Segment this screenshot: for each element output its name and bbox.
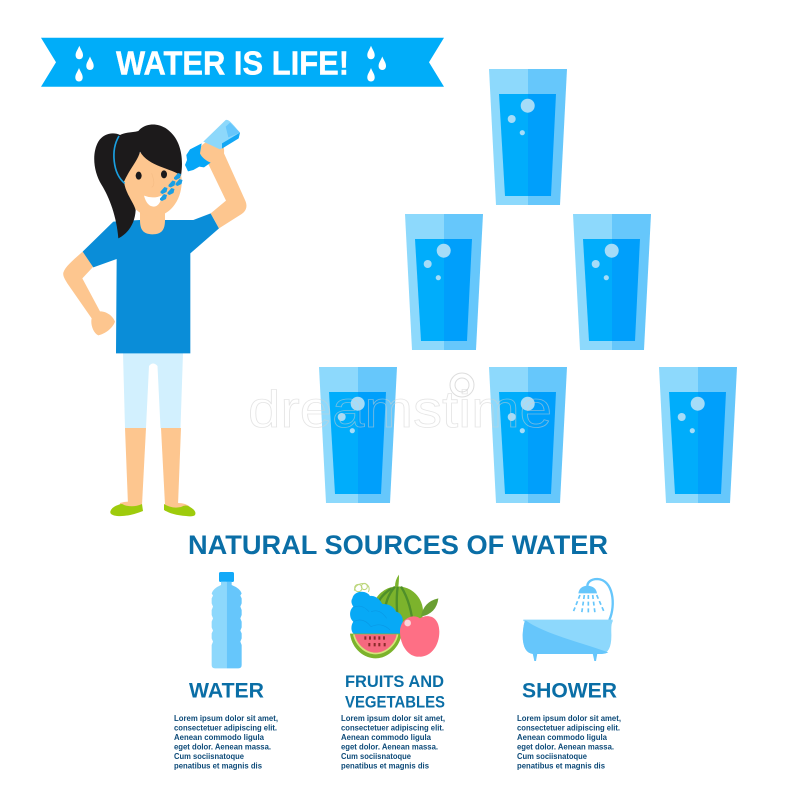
tendril bbox=[354, 583, 369, 592]
right arm bbox=[199, 140, 246, 228]
column: fruits and vegetables bbox=[341, 673, 445, 770]
text block: fruits and vegetables bbox=[341, 713, 445, 770]
glass row 2 left bbox=[405, 214, 483, 350]
heading: fruits and vegetables: VEGETABLES bbox=[345, 694, 445, 712]
watermelon bbox=[372, 586, 423, 637]
text block: shower: penatibus et magnis dis bbox=[517, 760, 605, 770]
text block: water: Lorem ipsum dolor sit amet, bbox=[174, 713, 278, 723]
text block: fruits and vegetables: penatibus et magnis dis bbox=[341, 760, 429, 770]
glass row 3 middle bbox=[489, 367, 567, 503]
text block: water: penatibus et magnis dis bbox=[174, 760, 262, 770]
text block: water: consectetuer adipiscing elit. bbox=[174, 722, 277, 732]
text block: shower: consectetuer adipiscing elit. bbox=[517, 722, 620, 732]
icon: water bottle bbox=[212, 572, 242, 668]
face bbox=[124, 150, 182, 217]
text block: shower: Lorem ipsum dolor sit amet, bbox=[517, 713, 621, 723]
shower head bbox=[578, 586, 597, 593]
text block: water: eget dolor. Aenean massa. bbox=[174, 742, 271, 752]
text block: shower: Cum sociisnatoque bbox=[517, 751, 587, 761]
splashing water droplets bbox=[160, 173, 182, 201]
mouth bbox=[144, 195, 162, 207]
grapes bbox=[350, 592, 403, 635]
left arm bbox=[63, 252, 115, 335]
text block: shower: Aenean commodo ligula bbox=[517, 732, 607, 742]
text block: water: Cum sociisnatoque bbox=[174, 751, 244, 761]
shower spray bbox=[573, 595, 604, 613]
title banner bbox=[41, 38, 444, 87]
glass row 2 right bbox=[573, 214, 651, 350]
text block: water bbox=[174, 713, 278, 770]
tub feet bbox=[533, 653, 597, 661]
column: shower bbox=[517, 680, 621, 770]
shoes bbox=[110, 504, 195, 516]
icon: right water drops bbox=[367, 46, 386, 82]
text block: fruits and vegetables: Lorem ipsum dolor sit amet, bbox=[341, 713, 445, 723]
text block: shower bbox=[517, 713, 621, 770]
shirt bbox=[83, 213, 219, 353]
icon: bathtub with shower bbox=[523, 579, 613, 661]
text block: shower: eget dolor. Aenean massa. bbox=[517, 742, 614, 752]
glass row 1 bbox=[489, 69, 567, 205]
icon: left water drops bbox=[75, 46, 94, 82]
glass row 3 right bbox=[659, 367, 737, 503]
heading: water: WATER bbox=[189, 680, 264, 702]
text block: fruits and vegetables: eget dolor. Aenean massa. bbox=[341, 742, 438, 752]
leaf bbox=[421, 598, 438, 617]
glass row 3 left bbox=[319, 367, 397, 503]
text block: water: Aenean commodo ligula bbox=[174, 732, 264, 742]
heading: shower: SHOWER bbox=[522, 680, 617, 702]
shorts bbox=[123, 353, 183, 428]
eyes bbox=[136, 170, 167, 180]
headband bbox=[114, 136, 125, 183]
icon: fruits bbox=[350, 575, 439, 658]
nose bbox=[152, 173, 154, 187]
shower pipe bbox=[587, 579, 613, 620]
legs bbox=[120, 428, 190, 511]
neck shadow bbox=[140, 209, 165, 216]
text block: fruits and vegetables: consectetuer adipiscing elit. bbox=[341, 722, 444, 732]
watermark: dreamstime bbox=[248, 381, 552, 439]
water bottle bbox=[185, 120, 240, 171]
text block: fruits and vegetables: Cum sociisnatoque bbox=[341, 751, 411, 761]
heading: fruits and vegetables bbox=[345, 673, 445, 712]
illustration: girl pouring water on her face bbox=[63, 120, 246, 516]
title: WATER IS LIFE! bbox=[116, 44, 349, 82]
text block: fruits and vegetables: Aenean commodo ligula bbox=[341, 732, 431, 742]
heading: fruits and vegetables: FRUITS AND bbox=[345, 673, 444, 691]
hair bbox=[94, 124, 182, 238]
section heading: NATURAL SOURCES OF WATER bbox=[188, 530, 608, 560]
apple bbox=[400, 616, 439, 657]
watermelon slice bbox=[350, 634, 402, 658]
tub bbox=[523, 620, 613, 654]
neck bbox=[140, 203, 165, 235]
column: water bbox=[174, 680, 278, 770]
